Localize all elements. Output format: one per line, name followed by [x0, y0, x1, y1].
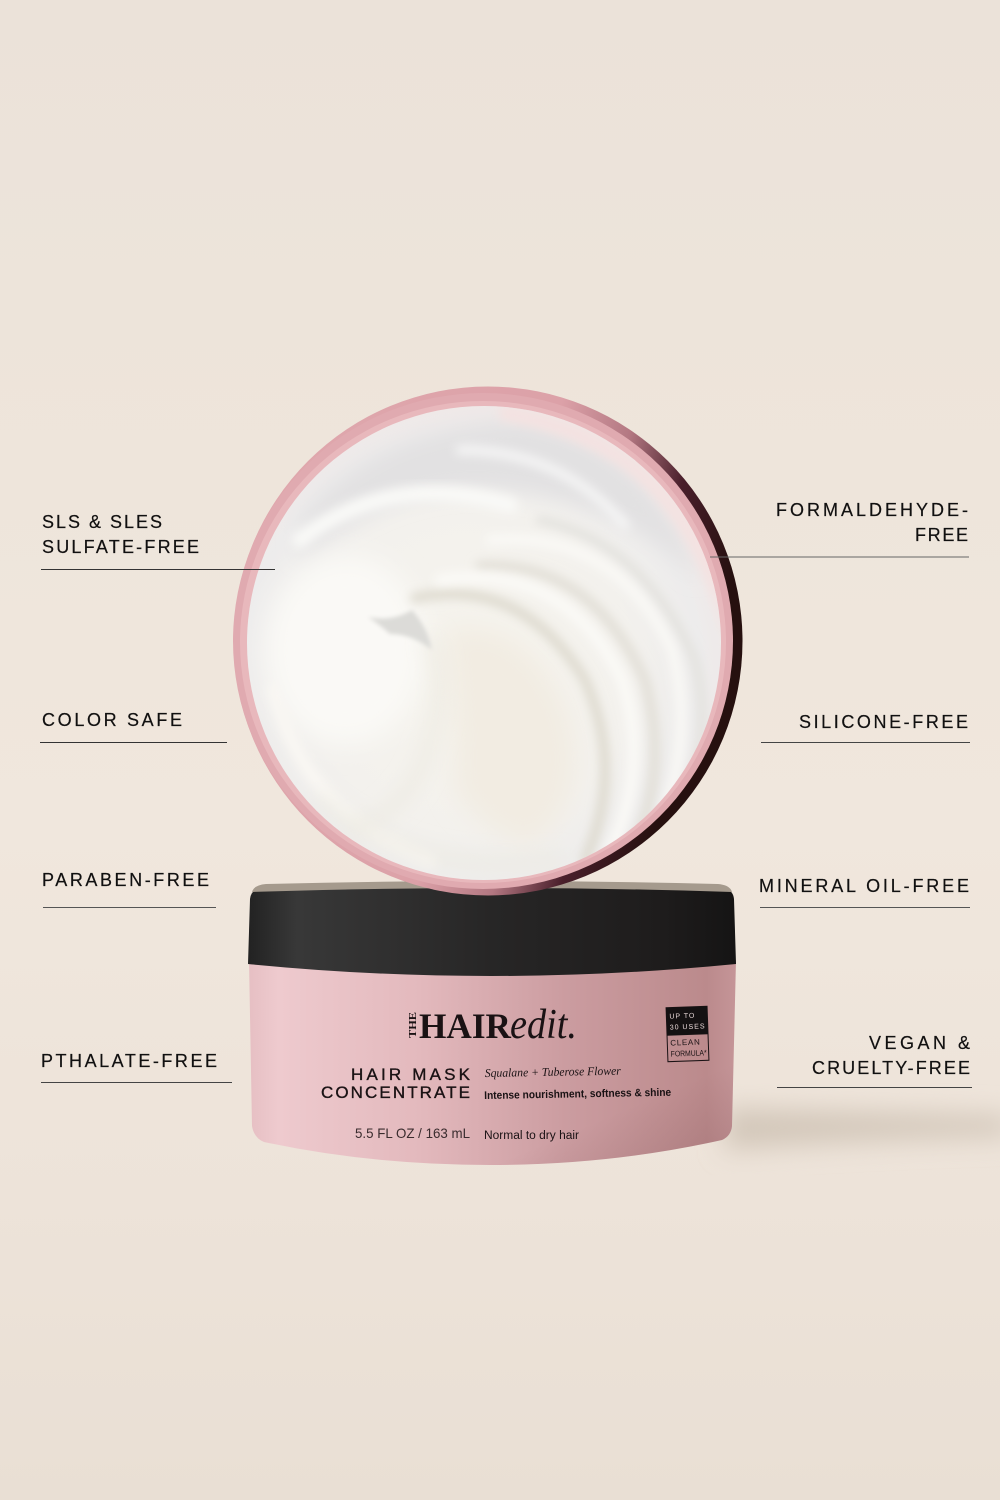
callout: SLS and SLES sulfate-free: SULFATE-FREE [42, 537, 199, 557]
jar base with lid [248, 881, 736, 1165]
badge: FORMULA* [671, 1048, 707, 1059]
ingredients and benefits [484, 1063, 671, 1102]
callout: paraben-free: PARABEN-FREE [42, 870, 209, 890]
swirl peak [371, 610, 432, 648]
callout: mineral oil-free: MINERAL OIL-FREE [759, 876, 969, 896]
brand logo [408, 1002, 577, 1048]
callout: formaldehyde-free: FREE [915, 525, 968, 545]
pink inner wall [510, 416, 664, 501]
callout: pthalate-free: PTHALATE-FREE [41, 1051, 217, 1071]
pink rim [233, 393, 733, 889]
jar body [249, 960, 736, 1165]
callout: vegan and cruelty-free: CRUELTY-FREE [812, 1058, 970, 1078]
badge [666, 1006, 709, 1062]
callout: formaldehyde-free: FORMALDEHYDE- [776, 500, 968, 520]
callout: vegan and cruelty-free: VEGAN & [869, 1033, 970, 1053]
callout: formaldehyde-free [710, 500, 969, 557]
product name: HAIR MASK [351, 1065, 471, 1084]
product name: CONCENTRATE [321, 1083, 470, 1102]
open jar with cream [233, 386, 742, 896]
product size: 5.5 FL OZ / 163 mL [355, 1125, 470, 1141]
cream surface [240, 400, 730, 890]
brand logo: THE [408, 1012, 419, 1038]
callout: SLS and SLES sulfate-free [41, 512, 275, 570]
callout: vegan and cruelty-free [777, 1033, 972, 1088]
callout: silicone-free: SILICONE-FREE [799, 712, 968, 732]
left bright mound [274, 567, 406, 726]
upper grey tone [313, 426, 674, 544]
callout: SLS and SLES sulfate-free: SLS & SLES [42, 512, 162, 532]
callout: color safe: COLOR SAFE [42, 710, 182, 730]
badge: UP TO [669, 1013, 696, 1021]
badge: CLEAN [670, 1038, 701, 1048]
ingredients and benefits: Intense nourishment, softness & shine [484, 1087, 671, 1102]
jar shadow on surface [725, 1108, 1000, 1150]
jar lid [248, 881, 736, 976]
hair type: Normal to dry hair [484, 1130, 579, 1142]
ingredients and benefits: Squalane + Tuberose Flower [485, 1064, 621, 1080]
brand logo: HAIR [419, 1006, 512, 1046]
dark outer edge of jar [234, 386, 742, 896]
brand logo: edit. [510, 1002, 577, 1048]
badge: 30 USES [670, 1023, 706, 1032]
central warm swirl [458, 638, 566, 831]
product name [321, 1065, 471, 1102]
swirl ridges [275, 450, 702, 865]
